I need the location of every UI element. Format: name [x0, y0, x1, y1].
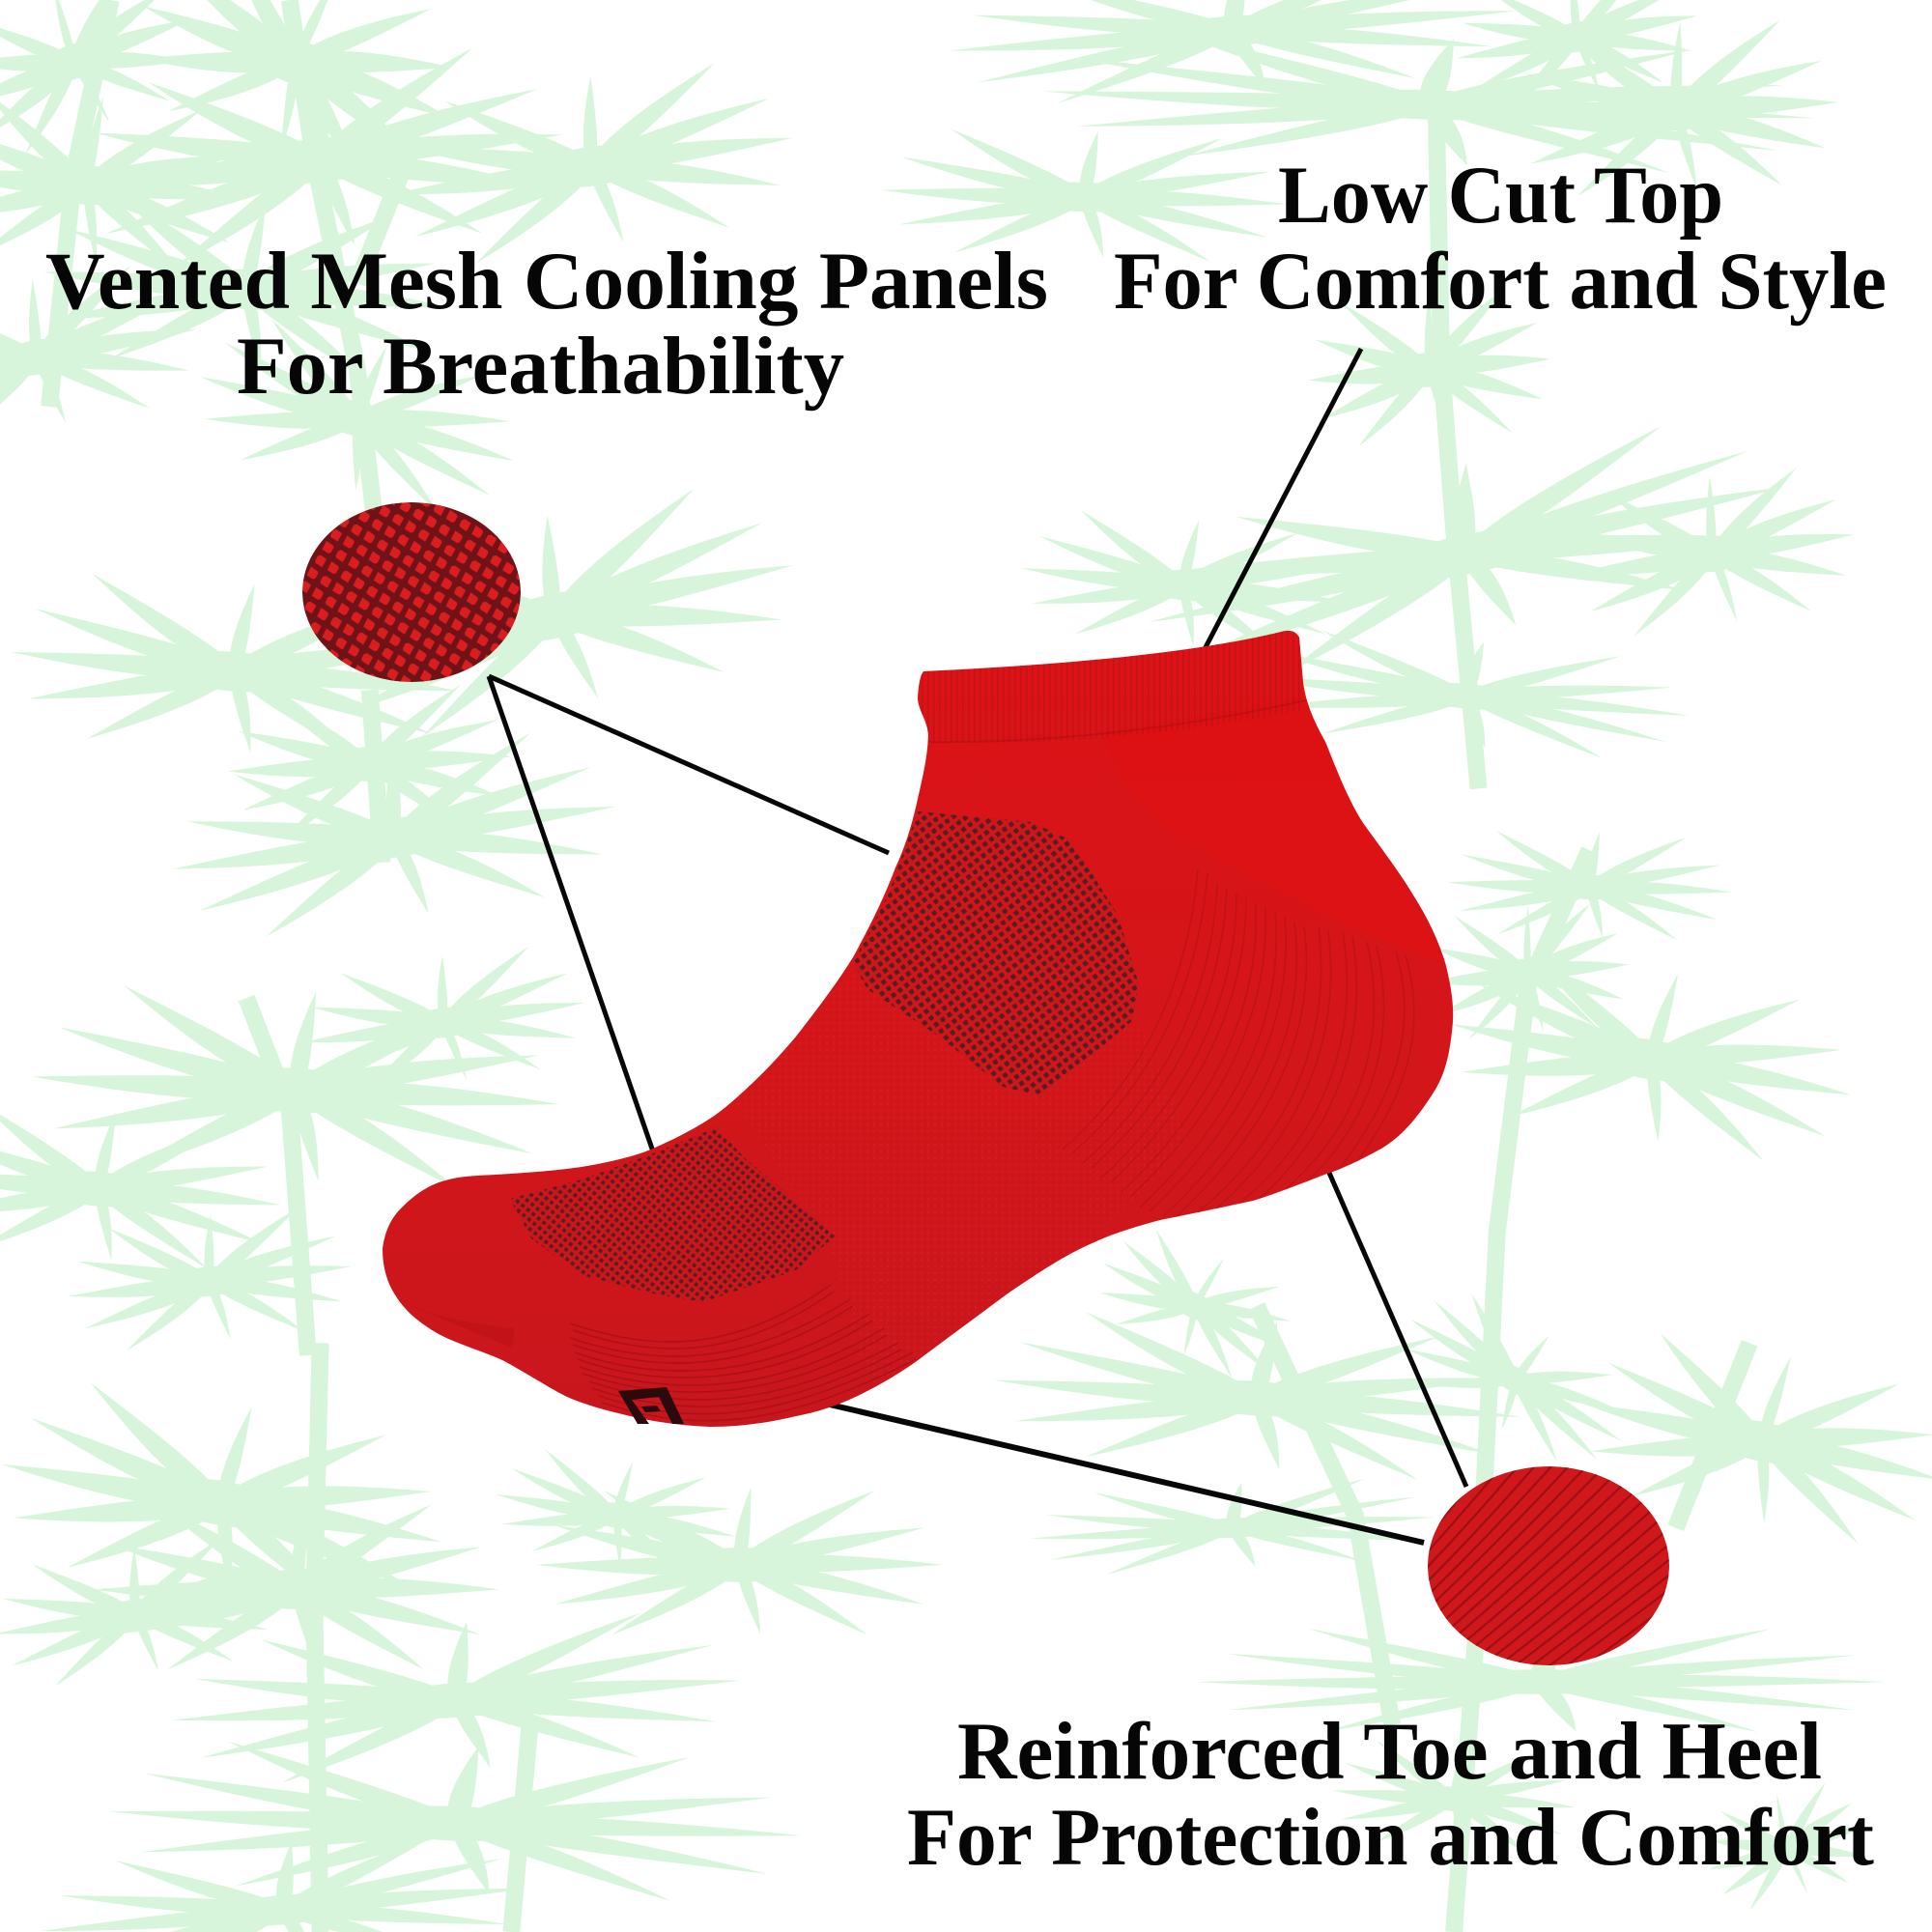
cuff seam	[927, 700, 1306, 742]
mesh panel: ankle	[853, 811, 1139, 1095]
upper heel patch	[1307, 701, 1446, 965]
sock	[383, 628, 1453, 1427]
line: heel to swatch	[1329, 1173, 1466, 1487]
toe ribbing	[570, 1285, 916, 1421]
label: vented mesh: For Breathability	[237, 321, 844, 412]
label: vented mesh	[45, 236, 1048, 412]
label: reinforced toe and heel: Reinforced Toe and Heel	[957, 1706, 1822, 1797]
label: low cut top	[1114, 150, 1887, 327]
swatch: reinforced knit texture	[1428, 1466, 1669, 1665]
label: low cut top: Low Cut Top	[1278, 150, 1723, 241]
instep fine knit	[734, 956, 1188, 1391]
label: vented mesh: Vented Mesh Cooling Panels	[45, 236, 1048, 327]
swatch: mesh texture	[302, 502, 521, 682]
mesh panel: toe	[510, 1127, 836, 1302]
line: mesh to toe panel	[489, 676, 653, 1151]
label: low cut top: For Comfort and Style	[1114, 236, 1887, 327]
toe ridge	[419, 1309, 514, 1347]
label: reinforced toe and heel	[907, 1706, 1874, 1883]
line: low cut top	[1205, 349, 1361, 649]
logo mark on sole	[618, 1387, 684, 1424]
label: reinforced toe and heel: For Protection and Comfort	[907, 1792, 1874, 1883]
line: toe to swatch	[817, 1402, 1424, 1543]
cuff ribbing	[918, 628, 1304, 743]
heel ribbing	[1063, 869, 1414, 1219]
sock body	[383, 631, 1453, 1427]
line: mesh to ankle panel	[489, 676, 889, 853]
callout lines	[489, 349, 1466, 1543]
